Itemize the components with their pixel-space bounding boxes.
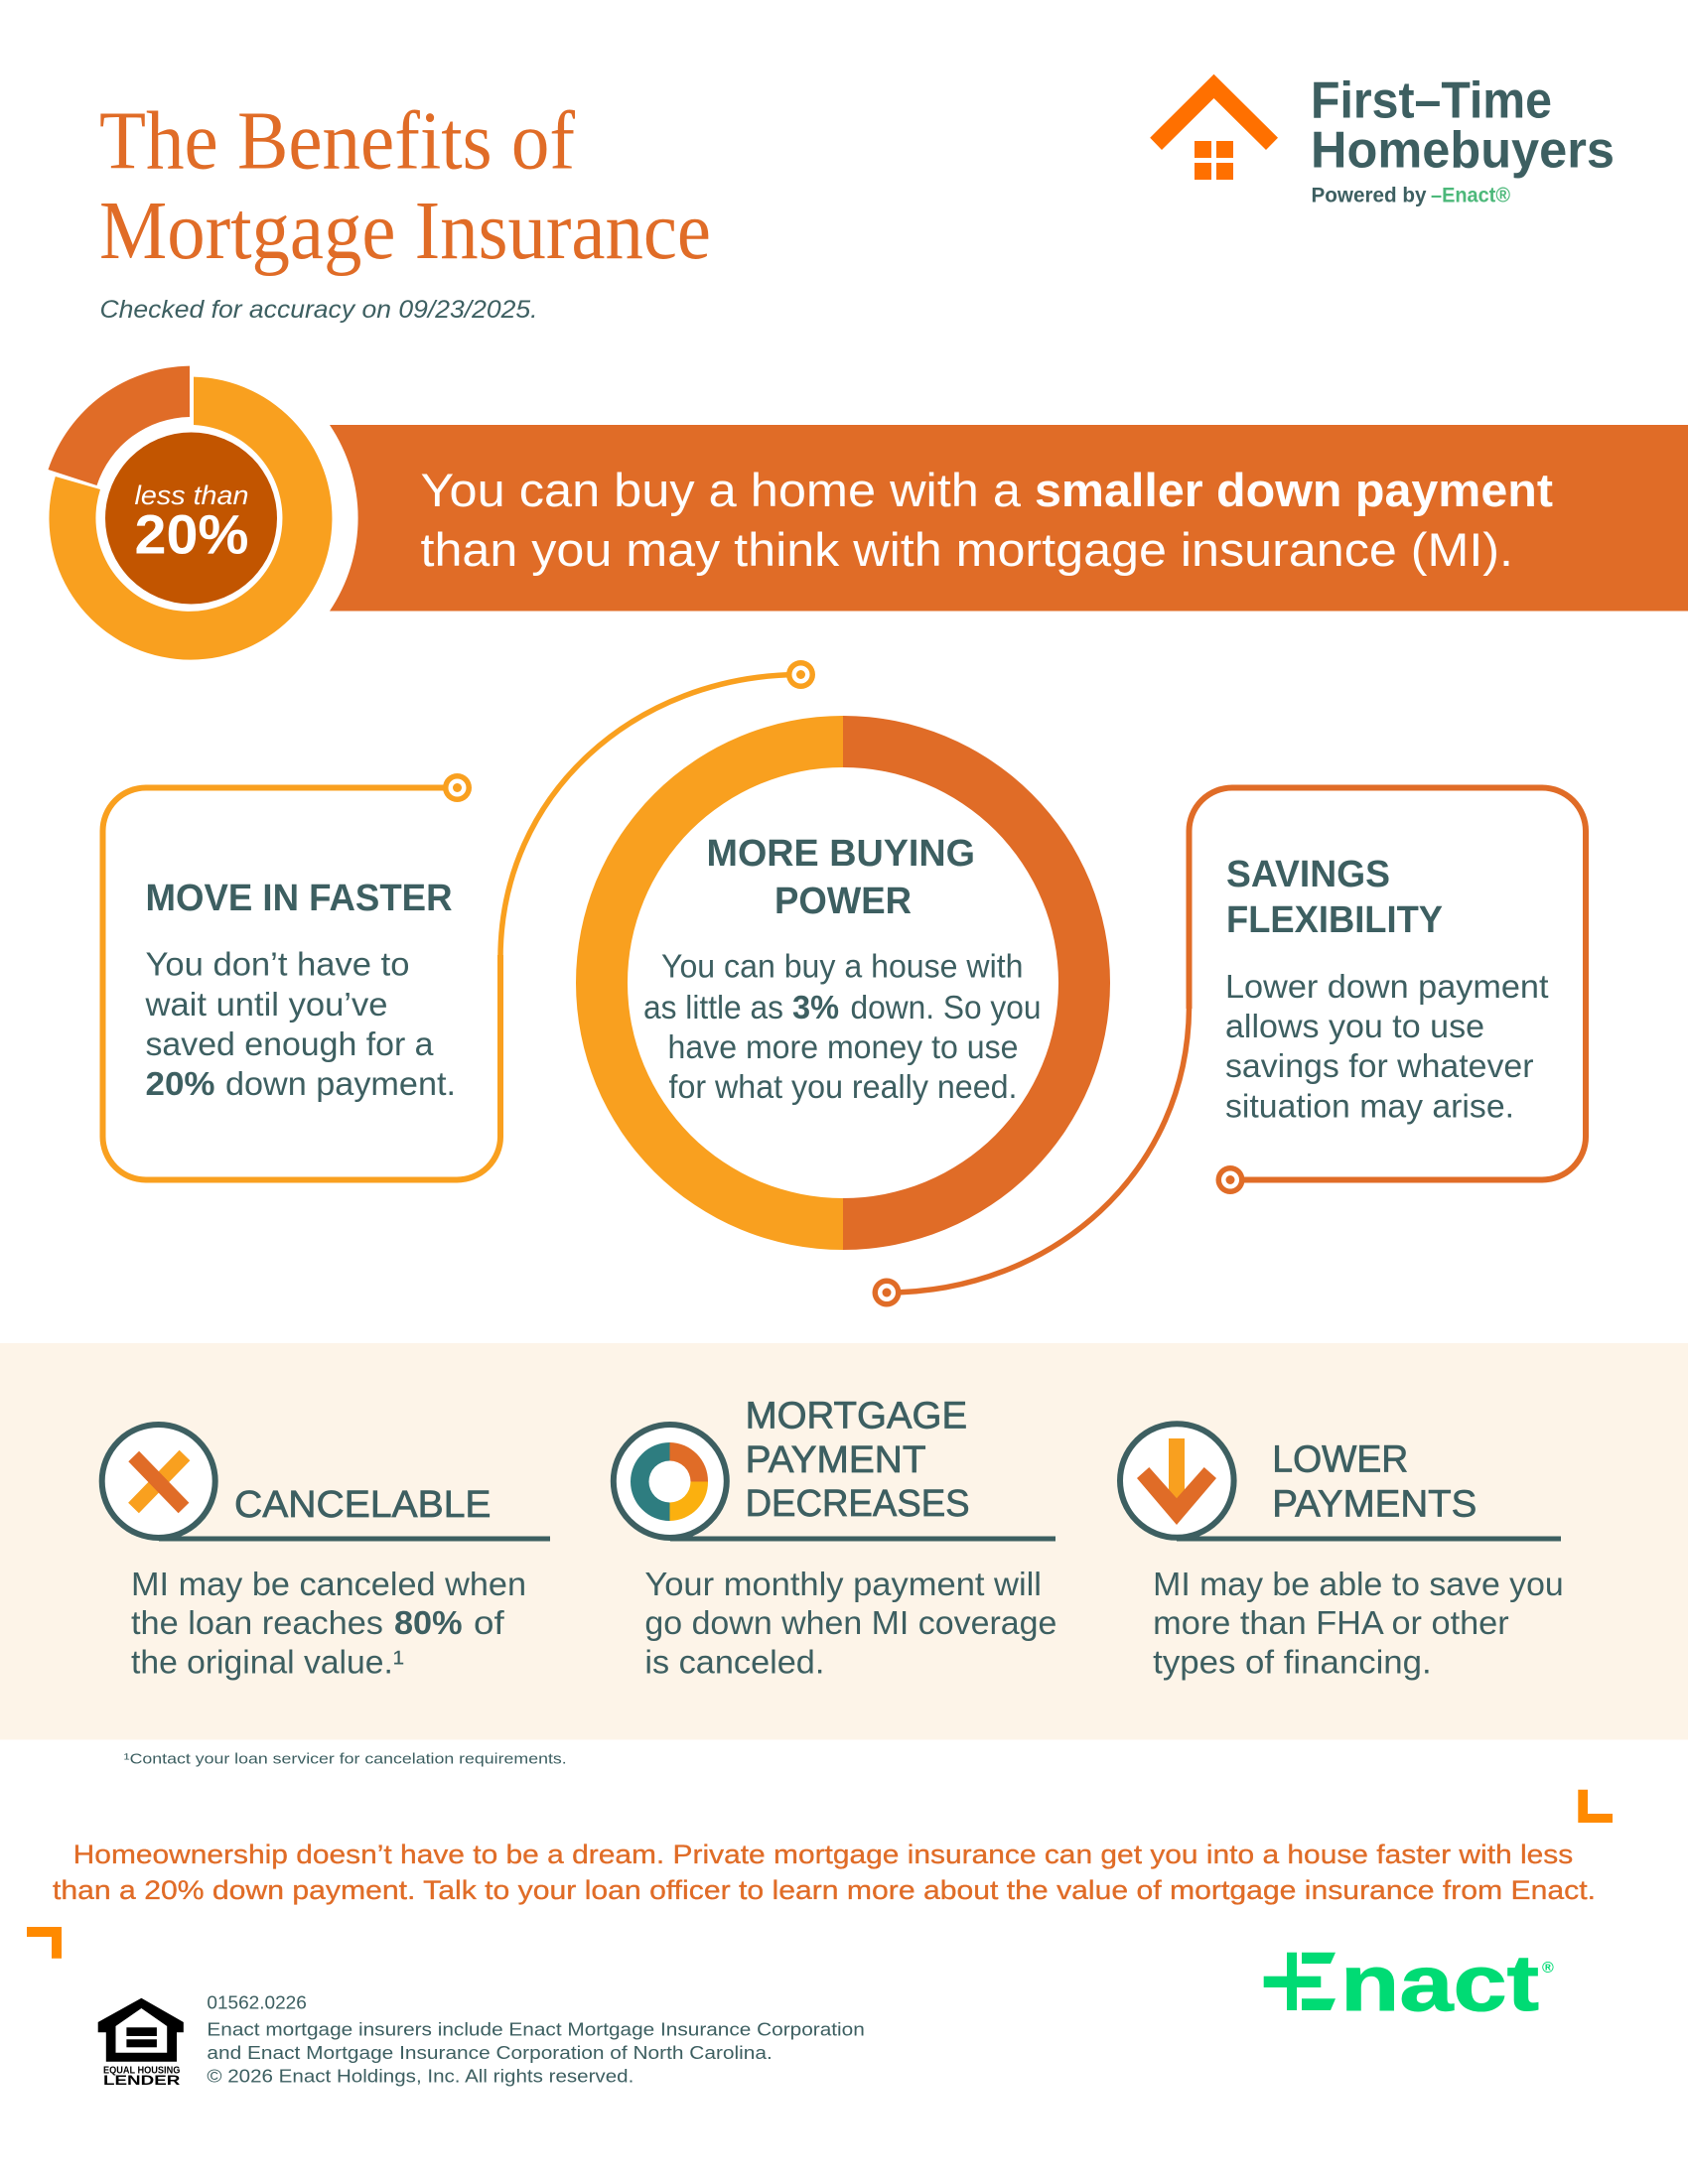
logo wordmark: nact (1340, 1939, 1539, 2027)
heading (707, 833, 975, 922)
body text (644, 1566, 1056, 1680)
body text: go down when MI coverage (644, 1604, 1056, 1641)
body text: the original value.¹ (131, 1643, 404, 1680)
body text: 20% (145, 1065, 214, 1102)
icon: segmented ring (614, 1425, 727, 1538)
connector dot (872, 1279, 902, 1306)
ring left half (576, 716, 843, 1250)
body text: types of financing. (1153, 1643, 1432, 1680)
heading: MOVE IN FASTER (145, 878, 453, 919)
heading (746, 1395, 970, 1525)
body text: MI may be able to save you (1153, 1566, 1564, 1602)
call to action: Homeownership doesn’t have to be a dream. Private mortgage insurance can get you into a house faster with less (73, 1840, 1573, 1869)
heading rule (159, 1537, 550, 1541)
heading (1226, 854, 1443, 941)
body text: of (474, 1604, 505, 1641)
accuracy date note: Checked for accuracy on 09/23/2025. (99, 296, 538, 324)
body text: MI may be canceled when (131, 1566, 526, 1602)
icon: house roof and window (1150, 74, 1278, 180)
panel: move in faster (103, 660, 815, 1179)
donut center (105, 433, 277, 604)
legal text (207, 1992, 865, 2087)
body text: saved enough for a (145, 1025, 434, 1062)
benefit: lower payments (1120, 1424, 1564, 1680)
banner text: smaller down payment (1035, 464, 1553, 516)
call to action: than a 20% down payment. Talk to your loan officer to learn more about the value of mortgage insurance from Enact. (53, 1875, 1596, 1905)
body text: allows you to use (1225, 1008, 1484, 1044)
body text (1225, 968, 1549, 1124)
call to action (53, 1840, 1596, 1905)
body text (131, 1566, 526, 1680)
icon: X mark (102, 1425, 215, 1538)
heading: MORE BUYING (707, 833, 975, 875)
logo wordmark: First–Time (1311, 71, 1552, 129)
logo wordmark: Homebuyers (1311, 121, 1615, 179)
body text (1153, 1566, 1564, 1680)
heading: MORTGAGE (746, 1395, 967, 1436)
panel: beige benefits band (0, 1343, 1688, 1739)
body text: wait until you’ve (144, 986, 387, 1023)
body text: 3% (792, 989, 839, 1025)
body text: is canceled. (644, 1643, 824, 1680)
heading: LOWER (1272, 1439, 1408, 1481)
legal text: Enact mortgage insurers include Enact Mortgage Insurance Corporation (207, 2020, 865, 2040)
heading: CANCELABLE (234, 1484, 491, 1526)
chart: less than 20% donut (48, 366, 332, 660)
body text: as little as (643, 989, 783, 1025)
banner: smaller down payment (330, 425, 1688, 612)
card outline with connector (887, 788, 1586, 1293)
donut remaining segment (49, 377, 332, 660)
donut label: less than (135, 480, 248, 510)
icon: equal housing lender (98, 1998, 184, 2088)
logo wordmark: Powered by (1311, 184, 1427, 206)
logo: First-Time Homebuyers (1150, 71, 1615, 206)
body text: for what you really need. (669, 1068, 1017, 1105)
logo mark (1264, 1953, 1336, 2010)
title (99, 95, 711, 277)
icon: down arrow (1120, 1424, 1234, 1538)
icon: equal housing lender: LENDER (103, 2073, 181, 2088)
heading: FLEXIBILITY (1226, 899, 1443, 941)
bracket: bottom left (27, 1927, 62, 1959)
body text: Your monthly payment will (644, 1566, 1042, 1602)
body text: situation may arise. (1225, 1087, 1514, 1124)
logo wordmark (1311, 71, 1615, 206)
heading: PAYMENTS (1272, 1484, 1477, 1526)
body text: You don’t have to (145, 946, 409, 983)
heading rule (1177, 1537, 1561, 1541)
donut label: 20% (135, 502, 248, 566)
panel: more buying power (576, 716, 1110, 1250)
benefit: mortgage payment decreases (614, 1395, 1056, 1680)
legal text: 01562.0226 (207, 1992, 307, 2012)
donut 20% segment (48, 366, 190, 485)
registered mark: ® (1542, 1960, 1554, 1977)
heading: PAYMENT (746, 1439, 926, 1481)
body text: You can buy a house with (661, 947, 1023, 985)
heading (1272, 1439, 1477, 1526)
title: Mortgage Insurance (99, 185, 711, 277)
heading: DECREASES (746, 1483, 970, 1525)
legal text: © 2026 Enact Holdings, Inc. All rights reserved. (207, 2067, 633, 2087)
heading rule (670, 1537, 1055, 1541)
banner text (421, 464, 1553, 576)
logo wordmark: –Enact® (1431, 184, 1510, 206)
icon: equal housing lender: EQUAL HOUSING (103, 2065, 181, 2076)
banner text: You can buy a home with a (421, 464, 1022, 516)
legal text: and Enact Mortgage Insurance Corporation of North Carolina. (207, 2043, 773, 2063)
banner text: than you may think with mortgage insurance (MI). (421, 523, 1513, 576)
body text: Lower down payment (1225, 968, 1549, 1005)
body text: more than FHA or other (1153, 1604, 1509, 1641)
ring right half (843, 716, 1110, 1250)
logo: Enact (1264, 1939, 1554, 2027)
heading: POWER (774, 881, 912, 922)
body text (643, 947, 1041, 1105)
panel: savings flexibility (872, 788, 1586, 1306)
connector dot (1215, 1165, 1245, 1194)
card outline with connector (103, 675, 801, 1179)
benefit: cancelable (102, 1425, 550, 1680)
body text: 80% (394, 1604, 463, 1641)
connector dot (443, 773, 472, 802)
connector dot (786, 660, 815, 689)
body text: down payment. (225, 1065, 456, 1102)
title: The Benefits of (99, 95, 575, 187)
body text: have more money to use (667, 1028, 1019, 1065)
body text: down. So you (850, 989, 1041, 1025)
body text (144, 946, 456, 1102)
banner shape (330, 425, 1688, 612)
bracket: top right (1578, 1790, 1613, 1823)
body text: savings for whatever (1225, 1047, 1534, 1084)
footnote: ¹Contact your loan servicer for cancelation requirements. (124, 1751, 567, 1768)
heading: SAVINGS (1226, 854, 1390, 895)
body text: the loan reaches (131, 1604, 383, 1641)
